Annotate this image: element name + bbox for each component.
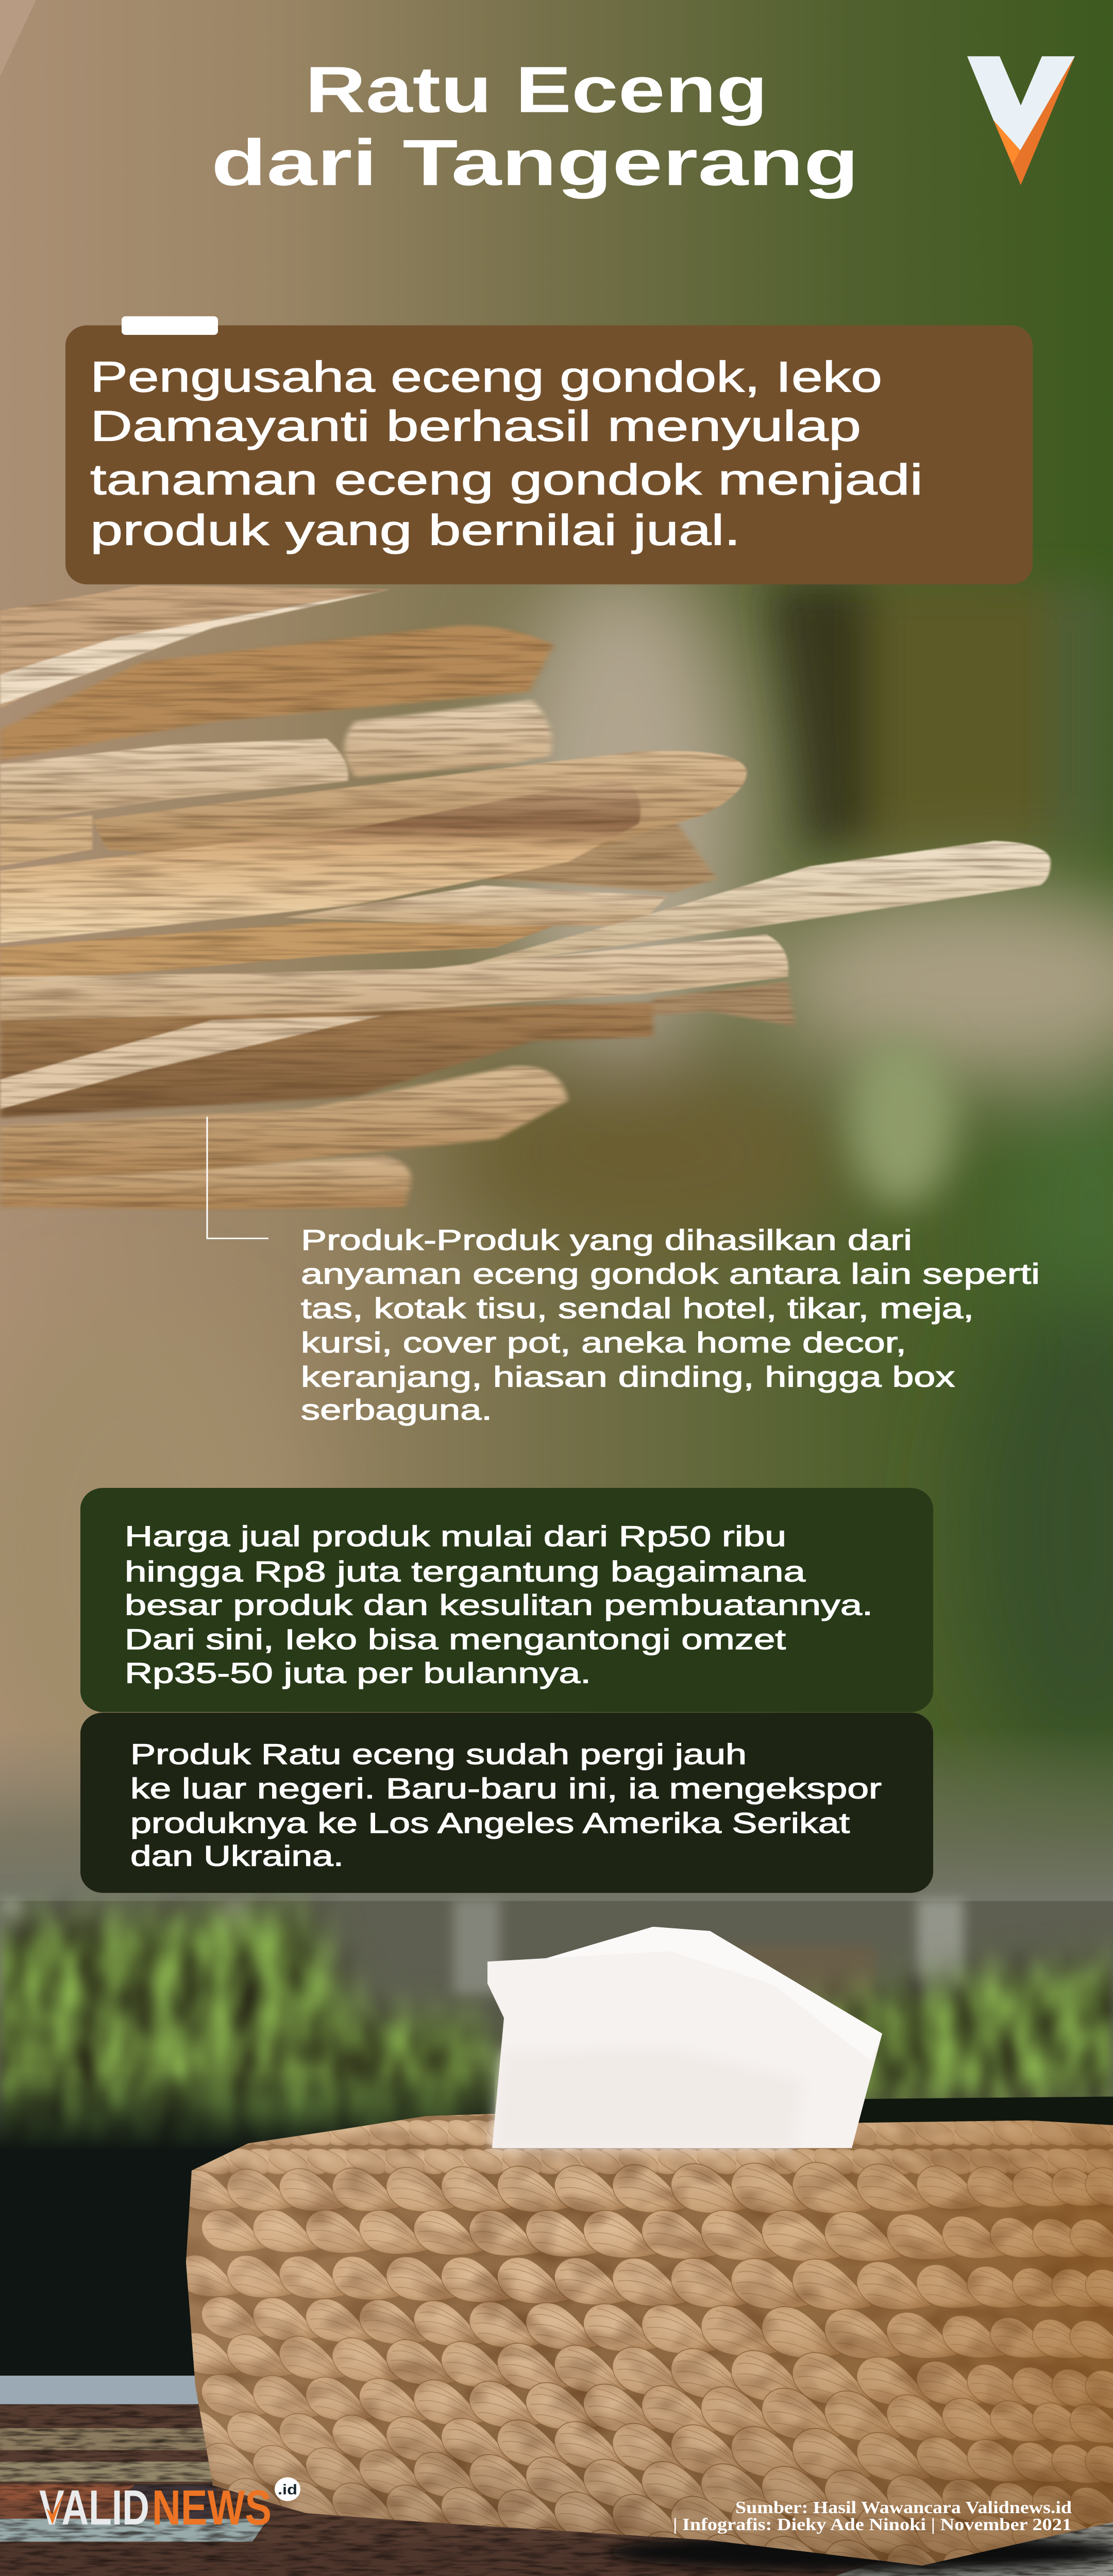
intro text [90, 353, 923, 554]
export text: Produk Ratu eceng sudah pergi jauh [130, 1739, 747, 1771]
intro text: Damayanti berhasil menyulap [90, 402, 861, 450]
export text: dan Ukraina. [130, 1840, 344, 1872]
photo: white tissue [487, 1927, 882, 2148]
logo: VALIDNEWS.id wordmark: VALID [39, 2480, 149, 2535]
price text: Dari sini, Ieko bisa mengantongi omzet [125, 1624, 786, 1655]
title [211, 53, 859, 199]
photo: woven water hyacinth tissue box [175, 2109, 1113, 2576]
text block: products: anyaman eceng gondok antara lain seperti [301, 1259, 1040, 1290]
text block: products [301, 1225, 1040, 1426]
source credit: Sumber: Hasil Wawancara Validnews.id [735, 2498, 1072, 2517]
panel: export [80, 1713, 933, 1893]
callout connector line [207, 1117, 268, 1239]
export text: ke luar negeri. Baru-baru ini, ia mengekspor [130, 1773, 882, 1805]
title: dari Tangerang [211, 126, 859, 199]
export text [130, 1739, 882, 1872]
text block: products: tas, kotak tisu, sendal hotel, tikar, meja, [301, 1293, 974, 1325]
logo: VALIDNEWS.id wordmark [39, 2477, 300, 2535]
photo: dried water hyacinth stalks [0, 585, 1051, 1209]
panel: intro [65, 316, 1033, 584]
text block: products: serbaguna. [301, 1395, 492, 1426]
photo: background bushes, wall and brick table [0, 1884, 1113, 2576]
source credit: | Infografis: Dieky Ade Ninoki | November 2021 [673, 2515, 1072, 2534]
background: blurred green and beige gradient [0, 0, 1113, 1903]
text block: products: keranjang, hiasan dinding, hingga box [301, 1362, 955, 1393]
price text: besar produk dan kesulitan pembuatannya. [125, 1589, 873, 1621]
icon: Validnews V logo [967, 56, 1075, 185]
price text: hingga Rp8 juta tergantung bagaimana [125, 1556, 806, 1588]
text block: products: kursi, cover pot, aneka home decor, [301, 1327, 906, 1359]
export text: produknya ke Los Angeles Amerika Serikat [130, 1807, 850, 1839]
intro text: Pengusaha eceng gondok, Ieko [90, 353, 882, 401]
source credit [673, 2498, 1072, 2534]
white tab accent [122, 316, 218, 335]
logo: VALIDNEWS.id wordmark: .id [278, 2482, 297, 2498]
text block: products: Produk-Produk yang dihasilkan dari [301, 1225, 912, 1256]
price text [125, 1521, 873, 1689]
title: Ratu Eceng [305, 53, 768, 126]
price text: Rp35-50 juta per bulannya. [125, 1658, 591, 1689]
panel: price and revenue [80, 1488, 933, 1712]
intro text: produk yang bernilai jual. [90, 506, 740, 554]
intro text: tanaman eceng gondok menjadi [90, 455, 923, 504]
logo: VALIDNEWS.id wordmark: NEWS [152, 2480, 272, 2535]
price text: Harga jual produk mulai dari Rp50 ribu [125, 1521, 786, 1552]
